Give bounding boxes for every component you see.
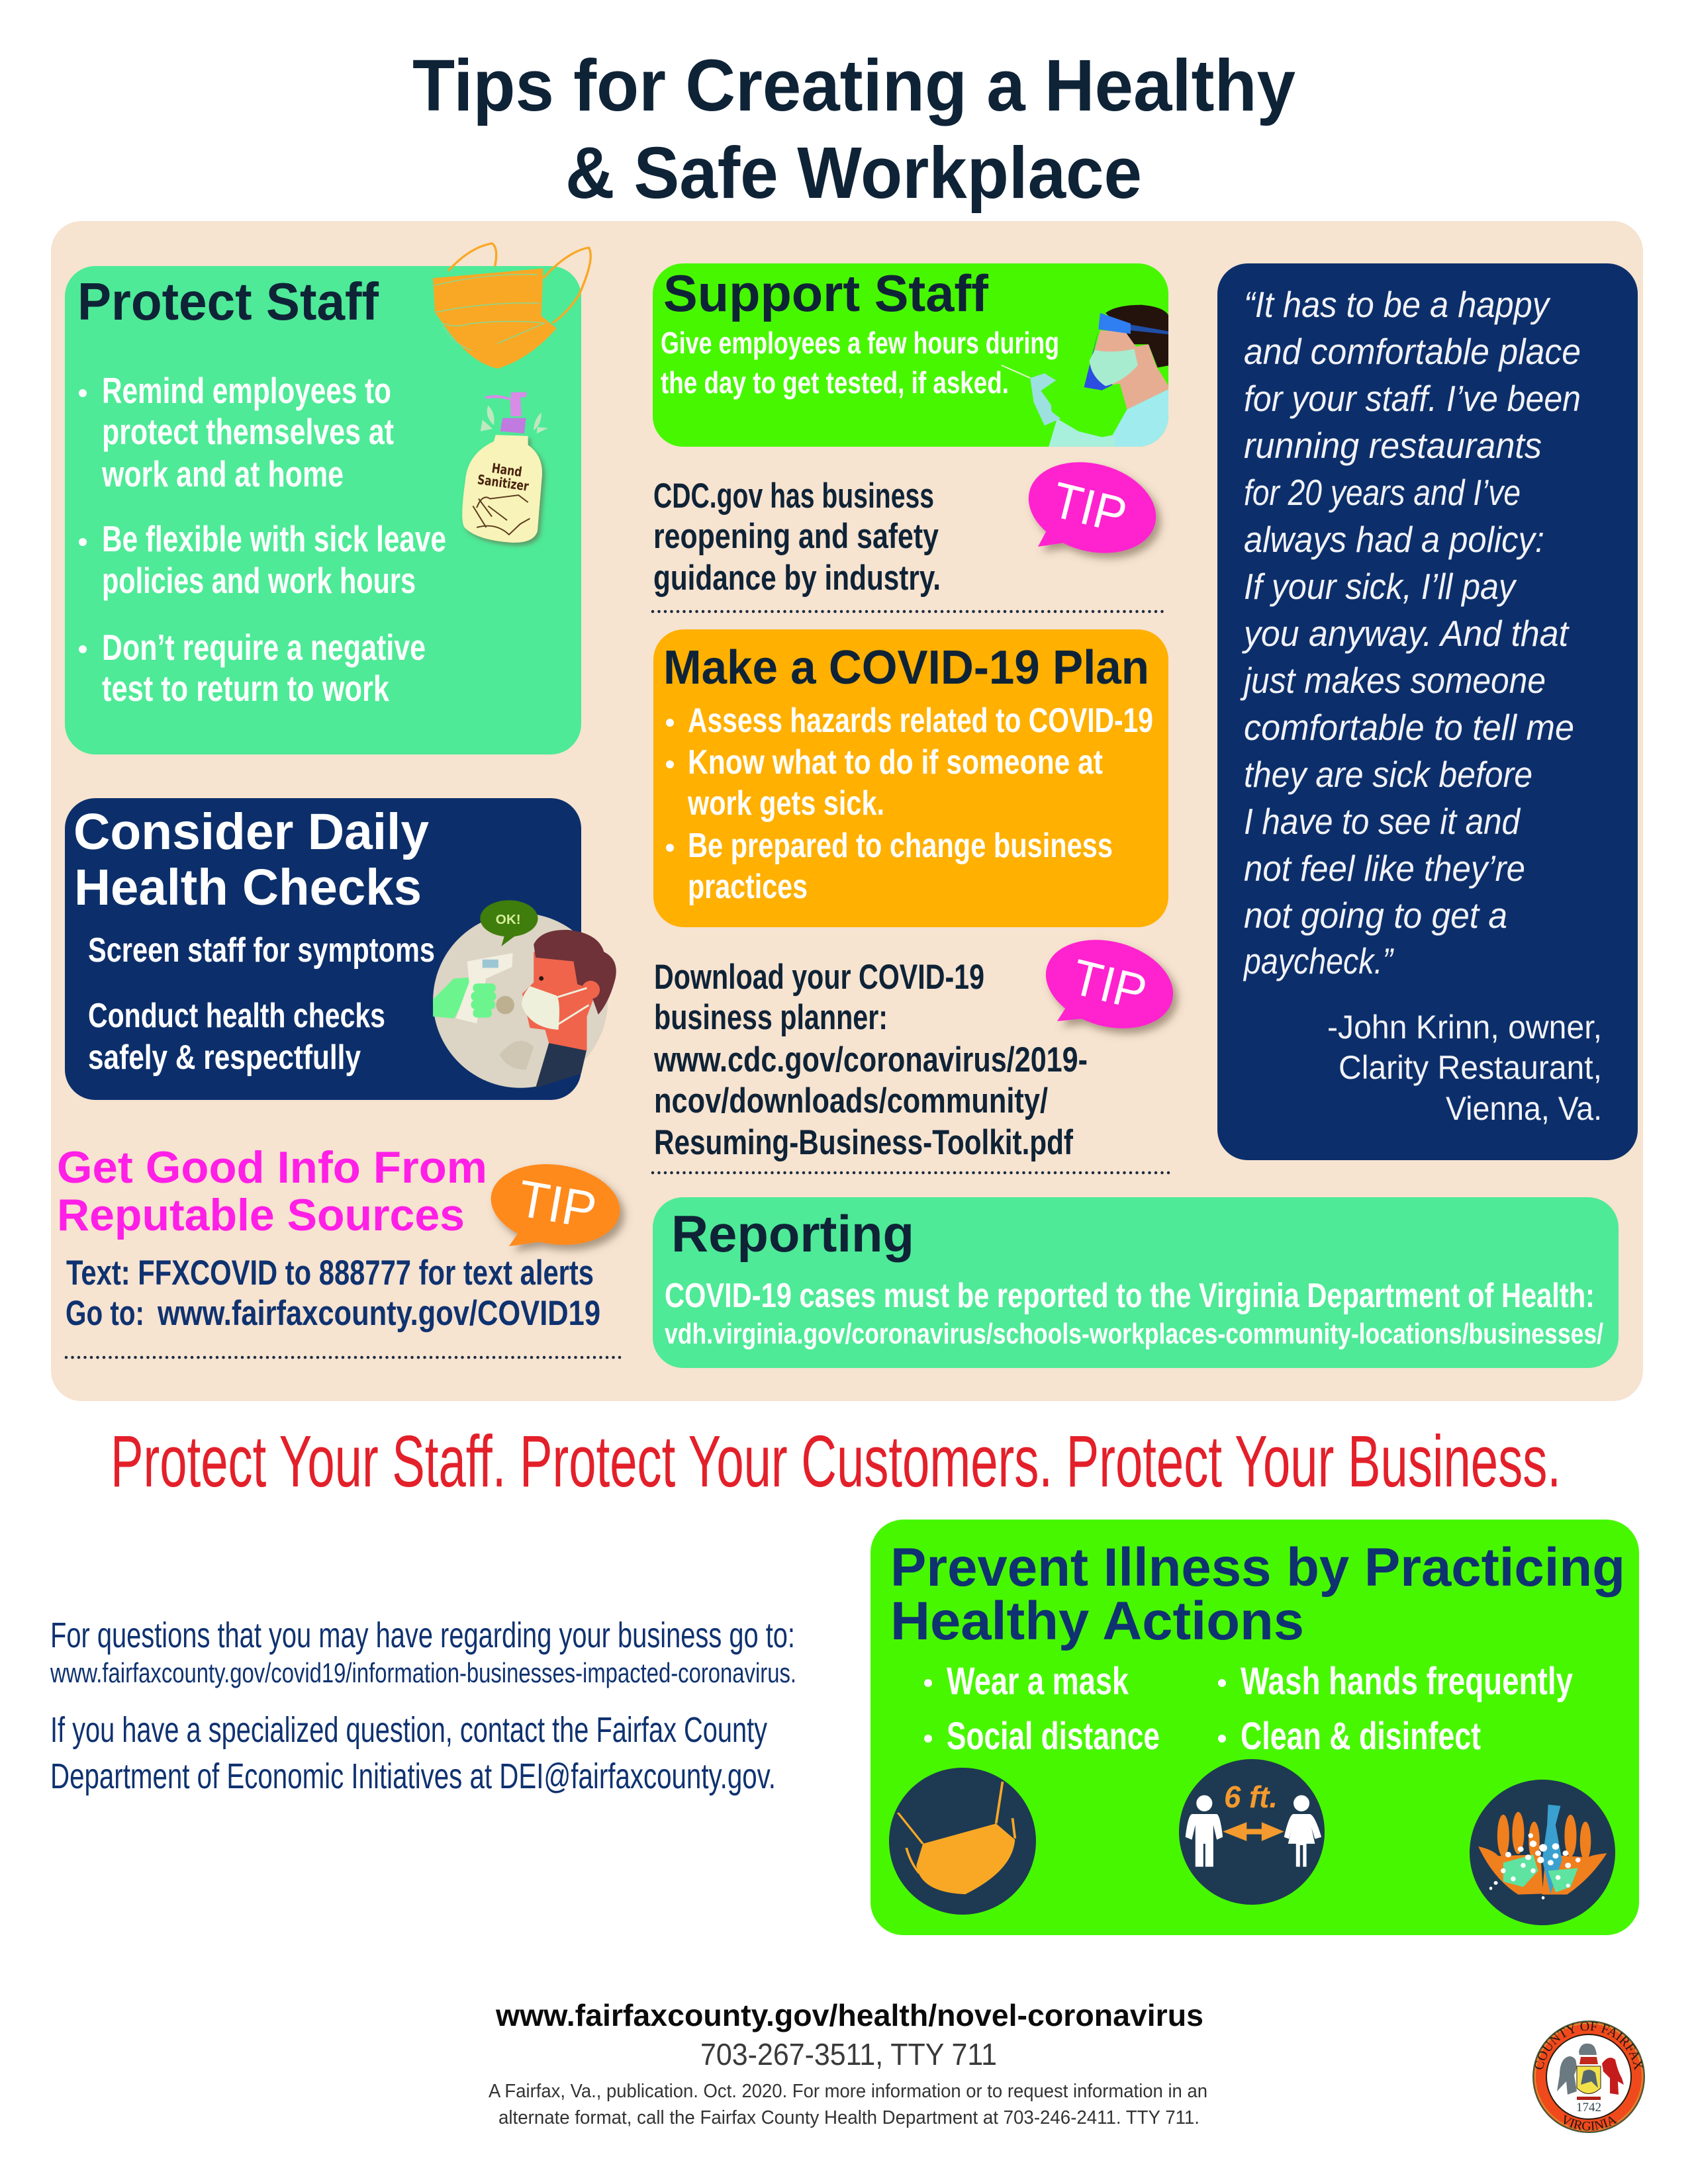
bullet list: covid plan bbox=[666, 702, 1153, 906]
bullet list: healthy actions: Wear a mask bbox=[947, 1660, 1129, 1703]
icon: county of fairfax seal: COUNTY OF FAIRFAX bbox=[1534, 2021, 1643, 2070]
heading: make a covid-19 plan: Make a COVID-19 Plan bbox=[663, 641, 1149, 694]
text: quote attribution bbox=[1327, 1009, 1602, 1127]
heading: get good info from reputable sources: Get Good Info From bbox=[57, 1142, 487, 1193]
text: quote: “It has to be a happy bbox=[1244, 284, 1551, 325]
bullet list: protect staff: test to return to work bbox=[102, 668, 389, 709]
bullet list: healthy actions bbox=[924, 1660, 1573, 1758]
icon: six feet distance circle: 6 ft. bbox=[1224, 1780, 1278, 1814]
label: hand sanitizer: Hand bbox=[491, 460, 523, 480]
icon: pink tip bubble one bbox=[1018, 449, 1166, 567]
icon: orange face mask bbox=[433, 244, 590, 369]
heading: support staff: Support Staff bbox=[663, 264, 989, 322]
label: hand sanitizer: Sanitizer bbox=[477, 471, 530, 494]
text: quote: just makes someone bbox=[1240, 660, 1546, 701]
text: health check instructions: Conduct health checks bbox=[88, 997, 385, 1035]
bullet list: covid plan: Assess hazards related to COVID-19 bbox=[688, 702, 1153, 740]
icon: county of fairfax seal: 1742 bbox=[1576, 2101, 1601, 2115]
section: get good info: Reputable Sources bbox=[57, 1190, 465, 1240]
text: quote: always had a policy: bbox=[1244, 519, 1544, 560]
text: health check instructions: safely & respectfully bbox=[88, 1038, 361, 1077]
text: quote: for 20 years and I’ve bbox=[1244, 472, 1521, 513]
icon: six feet distance circle bbox=[1179, 1759, 1325, 1905]
label: hand sanitizer bbox=[477, 458, 532, 494]
bullet list: healthy actions: Clean & disinfect bbox=[1241, 1715, 1481, 1758]
bullet list: covid plan: practices bbox=[688, 868, 808, 906]
section: get good info bbox=[57, 1142, 625, 1333]
text: quote: running restaurants bbox=[1244, 425, 1542, 466]
text: download business planner: business planner: bbox=[654, 998, 888, 1037]
bullet list: covid plan: Know what to do if someone at bbox=[688, 743, 1103, 782]
icon: county of fairfax seal bbox=[1532, 2021, 1645, 2133]
icon: temperature check illustration bbox=[433, 900, 616, 1088]
icon: hand washing circle bbox=[1470, 1780, 1615, 1925]
text: business questions contact: www.fairfaxcounty.gov/covid19/information-businesses-impacted-coronavirus. bbox=[50, 1657, 796, 1688]
icon: pink tip bubble two: TIP bbox=[1066, 949, 1152, 1021]
text: business questions contact: For questions that you may have regarding your business go to: bbox=[50, 1615, 795, 1655]
text: cdc guidance tip: guidance by industry. bbox=[653, 559, 941, 598]
heading: consider daily health checks: Consider Daily bbox=[73, 803, 429, 860]
panel: prevent illness bbox=[871, 1520, 1639, 1935]
heading: prevent illness by practicing healthy actions: Prevent Illness by Practicing bbox=[890, 1537, 1625, 1598]
text: quote: they are sick before bbox=[1244, 754, 1532, 795]
bullet list: healthy actions: Wash hands frequently bbox=[1241, 1660, 1573, 1703]
bullet list: covid plan: Be prepared to change business bbox=[688, 827, 1113, 865]
text: download business planner: Resuming-Business-Toolkit.pdf bbox=[654, 1123, 1073, 1162]
panel: peach background bbox=[51, 221, 1643, 1401]
text: business questions contact: If you have a specialized question, contact the Fairfax County bbox=[50, 1710, 767, 1750]
panel: support staff bbox=[653, 263, 1170, 449]
text: quote: you anyway. And that bbox=[1241, 613, 1570, 654]
icon: temperature check illustration: OK! bbox=[496, 912, 521, 927]
panel: reporting bbox=[653, 1197, 1619, 1368]
text: quote: If your sick, I’ll pay bbox=[1244, 566, 1517, 607]
text: quote: and comfortable place bbox=[1244, 331, 1581, 372]
text: cdc guidance tip: reopening and safety bbox=[653, 517, 939, 556]
text: alerts and website bbox=[66, 1253, 600, 1333]
text: quote: I have to see it and bbox=[1244, 801, 1521, 842]
text: alerts and website: Go to: bbox=[66, 1294, 144, 1333]
footer text: 703-267-3511, TTY 711 bbox=[700, 2037, 997, 2071]
icon: orange tip bubble: TIP bbox=[514, 1169, 601, 1240]
panel: consider daily health checks: Health Checks bbox=[74, 859, 422, 916]
text: health check instructions: Screen staff for symptoms bbox=[88, 931, 435, 970]
text: quote: comfortable to tell me bbox=[1244, 707, 1574, 748]
text: quote: not going to get a bbox=[1244, 895, 1507, 936]
icon: hand sanitizer bottle bbox=[462, 392, 548, 543]
bullet list: covid plan: work gets sick. bbox=[687, 784, 884, 823]
footer text: www.fairfaxcounty.gov/health/novel-coronavirus bbox=[495, 1998, 1203, 2032]
bullet list: protect staff: policies and work hours bbox=[102, 560, 416, 601]
panel: make a covid-19 plan bbox=[653, 629, 1168, 927]
text: quote: paycheck.” bbox=[1243, 940, 1394, 981]
panel: prevent illness: Healthy Actions bbox=[890, 1591, 1304, 1651]
title: & Safe Workplace bbox=[565, 132, 1142, 214]
heading: protect staff: Protect Staff bbox=[77, 272, 379, 331]
text: download business planner: Download your COVID-19 bbox=[654, 958, 984, 997]
text: quote attribution: -John Krinn, owner, bbox=[1327, 1009, 1602, 1046]
text: quote: not feel like they’re bbox=[1244, 848, 1525, 889]
title bbox=[412, 45, 1295, 214]
heading: reporting: Reporting bbox=[671, 1205, 914, 1263]
text: download business planner: ncov/downloads/community/ bbox=[654, 1081, 1048, 1120]
bullet list: protect staff: protect themselves at bbox=[102, 411, 394, 452]
text: health check instructions bbox=[88, 931, 435, 1077]
bullet list: protect staff: Be flexible with sick leave bbox=[102, 518, 446, 559]
text: support staff body bbox=[661, 326, 1059, 400]
footer text: alternate format, call the Fairfax County Health Department at 703-246-2411. TTY 711. bbox=[498, 2107, 1200, 2128]
icon: health worker with face shield and swab bbox=[1002, 305, 1170, 449]
text: alerts and website: www.fairfaxcounty.gov/COVID19 bbox=[157, 1294, 600, 1333]
text: download business planner bbox=[653, 958, 1088, 1162]
icon: pink tip bubble one: TIP bbox=[1047, 472, 1132, 544]
text: quote attribution: Clarity Restaurant, bbox=[1339, 1049, 1602, 1086]
text: support staff body: the day to get tested, if asked. bbox=[661, 365, 1009, 400]
bullet list: protect staff bbox=[79, 370, 446, 709]
bullet list: protect staff: Don’t require a negative bbox=[102, 627, 426, 668]
text: cdc guidance tip: CDC.gov has business bbox=[653, 477, 934, 516]
icon: county of fairfax seal: VIRGINIA bbox=[1564, 2115, 1618, 2131]
bullet list: healthy actions: Social distance bbox=[947, 1715, 1160, 1758]
panel: consider daily health checks bbox=[65, 798, 616, 1100]
text: reporting body bbox=[665, 1277, 1603, 1350]
text: cdc guidance tip bbox=[653, 477, 941, 598]
icon: orange tip bubble bbox=[486, 1156, 625, 1253]
icon: pink tip bubble two bbox=[1036, 927, 1183, 1042]
text: download business planner: www.cdc.gov/coronavirus/2019- bbox=[653, 1040, 1088, 1079]
panel: restaurant owner quote bbox=[1217, 263, 1638, 1160]
text: support staff body: Give employees a few hours during bbox=[661, 326, 1059, 360]
bullet list: protect staff: Remind employees to bbox=[102, 370, 391, 411]
text: business questions contact bbox=[50, 1615, 796, 1796]
bullet list: protect staff: work and at home bbox=[101, 453, 344, 494]
title: Tips for Creating a Healthy bbox=[412, 45, 1295, 126]
footer text bbox=[489, 1998, 1207, 2128]
text: business questions contact: Department of Economic Initiatives at DEI@fairfaxcounty.gov. bbox=[50, 1756, 776, 1796]
panel: protect staff bbox=[65, 244, 590, 754]
text: quote bbox=[1240, 284, 1581, 981]
text: alerts and website: Text: FFXCOVID to 888777 for text alerts bbox=[66, 1253, 594, 1293]
text: quote: for your staff. I’ve been bbox=[1244, 378, 1581, 419]
footer text: A Fairfax, Va., publication. Oct. 2020. For more information or to request information in an bbox=[489, 2081, 1207, 2102]
icon: mask circle bbox=[889, 1768, 1036, 1915]
text: quote attribution: Vienna, Va. bbox=[1446, 1090, 1602, 1127]
